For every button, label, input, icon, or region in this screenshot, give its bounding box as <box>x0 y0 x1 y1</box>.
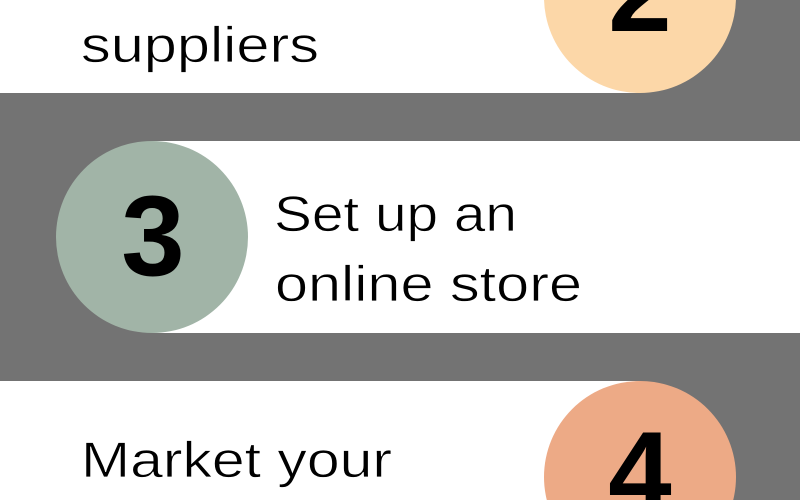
panel: step 4 <box>0 381 736 500</box>
text: suppliers: suppliers <box>81 17 319 73</box>
number 3: 3 <box>121 173 185 300</box>
text: set up an: Set up an <box>274 186 517 242</box>
text: online store: online store <box>275 256 582 312</box>
text: market your: Market your <box>81 432 392 488</box>
icon: step 3 circle <box>56 141 248 333</box>
panel: step 3 <box>56 141 800 333</box>
icon: step 4 circle <box>544 381 736 500</box>
icon: step 2 circle <box>544 0 736 93</box>
panel: step 2 <box>0 0 736 93</box>
